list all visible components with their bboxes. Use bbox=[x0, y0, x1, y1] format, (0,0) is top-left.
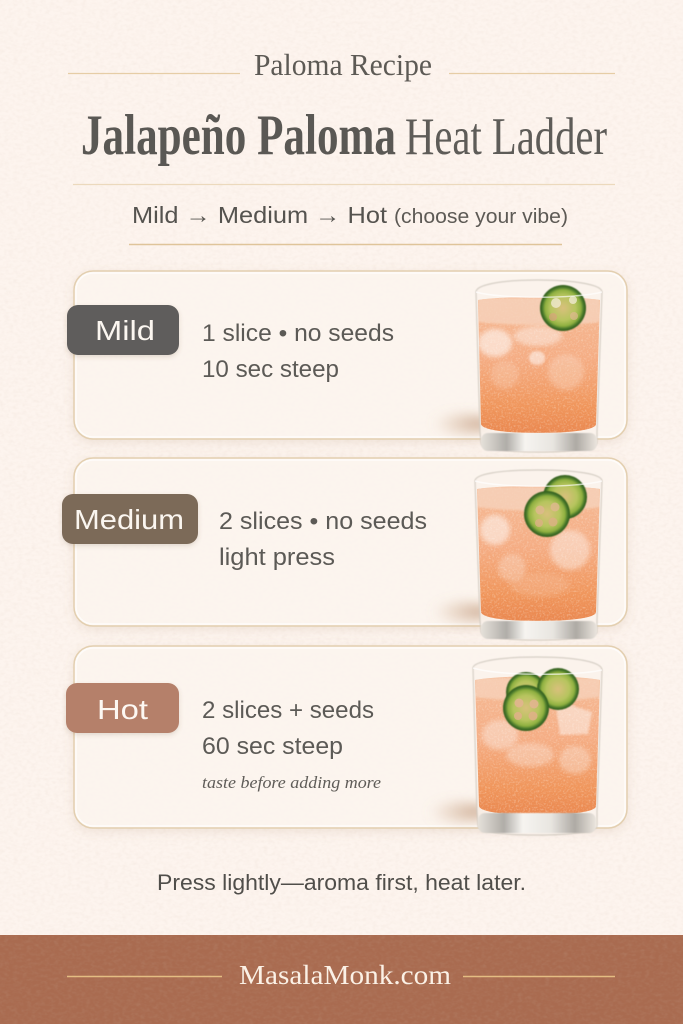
text: medium steps bbox=[219, 508, 427, 571]
text: hot steps bbox=[202, 697, 381, 792]
card: mild bbox=[74, 271, 627, 439]
note: taste first: taste before adding more bbox=[202, 773, 381, 792]
panel: hot bbox=[66, 646, 627, 835]
badge: hot bbox=[66, 683, 179, 733]
badge: mild: Mild bbox=[95, 315, 155, 346]
subtitle: Mild → Medium → Hot bbox=[132, 202, 388, 228]
footer url: MasalaMonk.com bbox=[239, 960, 451, 990]
icon: medium paloma glass bbox=[432, 470, 605, 640]
text: mild steps bbox=[202, 320, 394, 383]
tip text: Press lightly—aroma first, heat later. bbox=[157, 870, 526, 895]
footer band bbox=[0, 935, 683, 1024]
subtitle bbox=[132, 202, 568, 228]
text: medium steps: 2 slices • no seeds bbox=[219, 508, 427, 535]
subtitle: (choose your vibe) bbox=[394, 206, 568, 228]
card: medium bbox=[74, 458, 627, 626]
icon: hot paloma glass bbox=[428, 657, 604, 835]
kicker heading: Paloma Recipe bbox=[254, 47, 432, 82]
badge: medium bbox=[62, 494, 198, 544]
text: medium steps: light press bbox=[219, 544, 335, 571]
card: hot bbox=[74, 646, 627, 828]
icon: mild paloma glass bbox=[432, 280, 605, 452]
text: hot steps: 2 slices + seeds bbox=[202, 697, 374, 724]
panel: mild bbox=[67, 271, 627, 452]
title: Jalapeño Paloma bbox=[81, 104, 396, 167]
text: hot steps: 60 sec steep bbox=[202, 733, 343, 760]
title: Heat Ladder bbox=[405, 108, 607, 166]
badge: mild bbox=[67, 305, 179, 355]
text: mild steps: 1 slice • no seeds bbox=[202, 320, 394, 347]
text: mild steps: 10 sec steep bbox=[202, 356, 339, 383]
badge: medium: Medium bbox=[74, 504, 184, 535]
panel: medium bbox=[62, 458, 627, 640]
badge: hot: Hot bbox=[97, 694, 148, 725]
